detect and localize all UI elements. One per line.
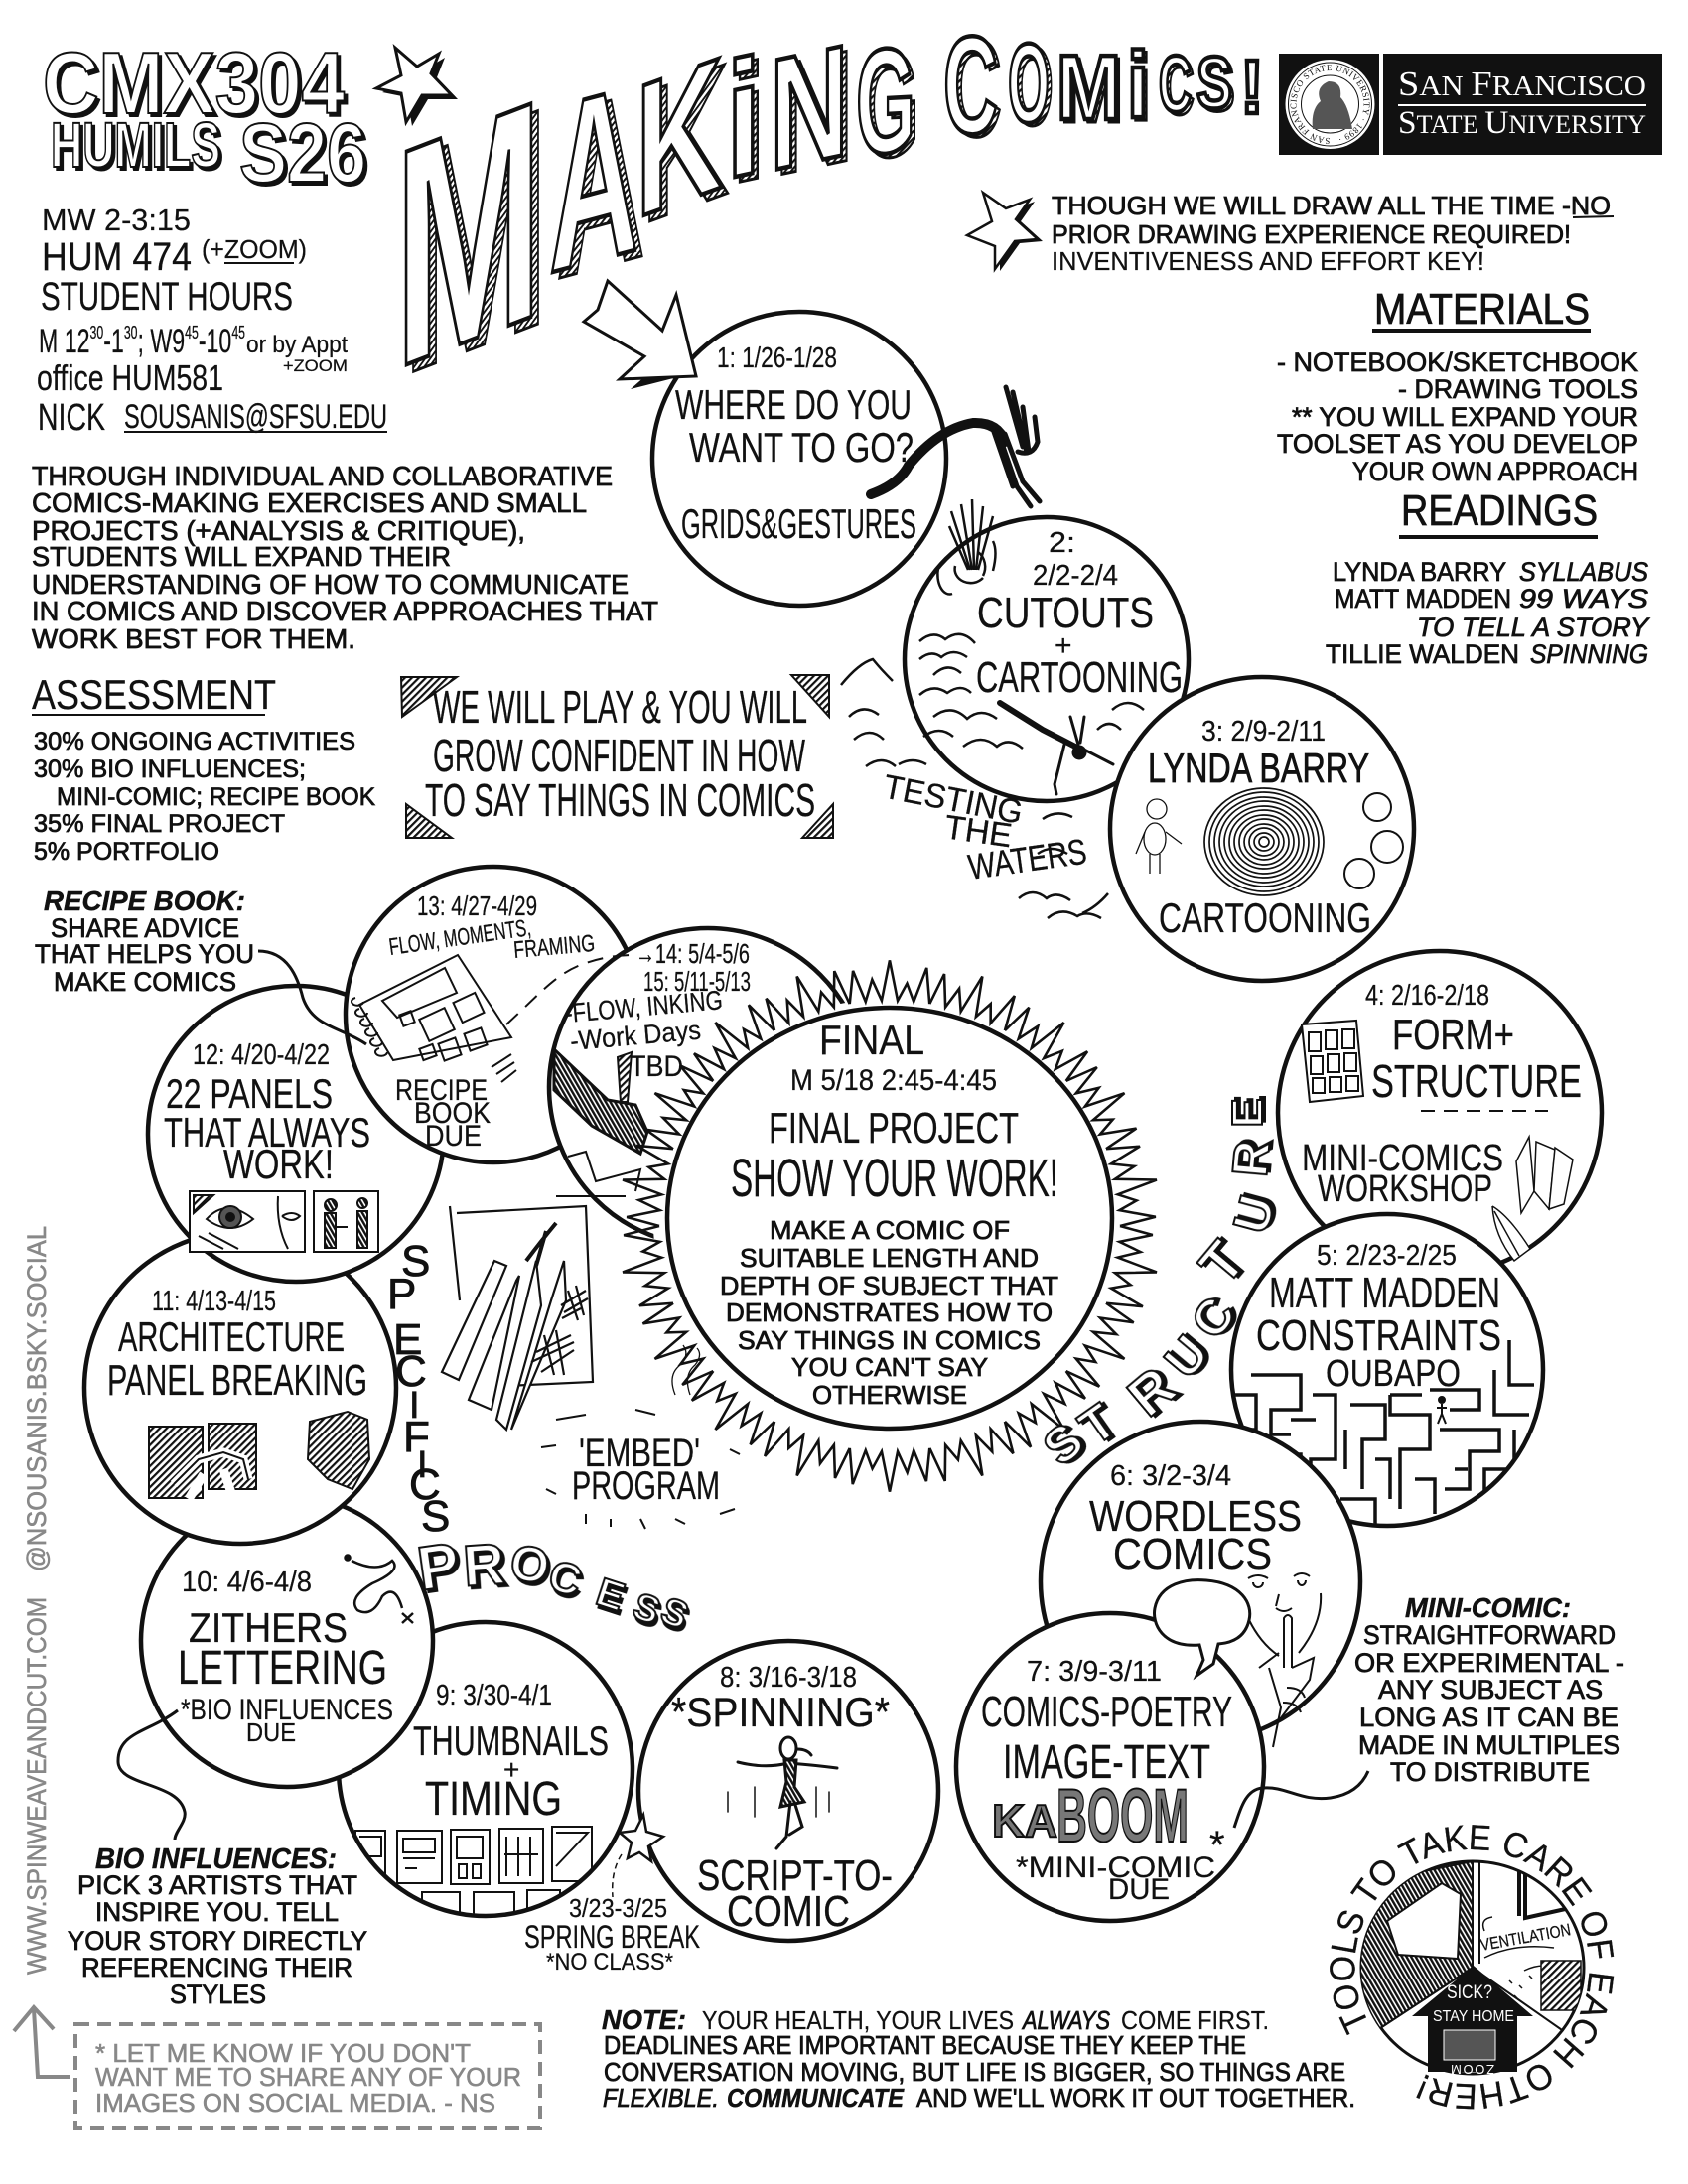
title: Making Comics: A	[549, 34, 638, 324]
panel: week 9 circle: TIMING	[425, 1773, 562, 1826]
mini-comic note: MADE IN MULTIPLES	[1358, 1730, 1620, 1760]
readings section: SPINNING	[1530, 639, 1648, 669]
label: structure curved lettering: R	[1116, 1354, 1187, 1429]
label: process curved lettering: R	[461, 1532, 507, 1599]
panel: week 3 circle: CARTOONING	[1159, 894, 1371, 941]
course description paragraph: STUDENTS WILL EXPAND THEIR	[32, 541, 451, 572]
mini-comic note: LONG AS IT CAN BE	[1359, 1703, 1618, 1732]
dashed social media notice	[75, 2024, 540, 2128]
class logistics text: -10	[199, 323, 231, 360]
icon: tiny figure in maze	[1437, 1397, 1447, 1424]
spring break marker	[524, 1815, 700, 1976]
assessment section: 30% ONGOING ACTIVITIES	[34, 728, 355, 755]
label: specifics vertical lettering: S	[421, 1492, 450, 1541]
panel: week 10 circle: DUE	[246, 1717, 296, 1747]
panel: week 8 circle	[638, 1641, 938, 1941]
title: Making Comics: M	[401, 39, 550, 443]
recipe book note: MAKE COMICS	[54, 967, 236, 997]
icon: page grid	[1302, 1021, 1363, 1102]
panel: week 11 circle: 11: 4/13-4/15	[152, 1286, 276, 1317]
tools to take care of each other emblem: TOOLS TO TAKE CARE OF EACH OTHER!	[1330, 1825, 1615, 2109]
icon: waves outside week 2	[841, 659, 1108, 918]
assessment section: 5% PORTFOLIO	[34, 838, 219, 866]
label: embed program: 'EMBED'	[579, 1432, 700, 1475]
tools to take care of each other emblem: VENTILATION	[1478, 1920, 1572, 1955]
panel: final project sunburst: MAKE A COMIC OF	[770, 1215, 1010, 1245]
readings section: SYLLABUS	[1519, 557, 1648, 587]
bio influences note: PICK 3 ARTISTS THAT	[77, 1870, 357, 1900]
title: Making Comics: N	[774, 17, 854, 210]
bio influences note: STYLES	[170, 1979, 266, 2009]
title: Making Comics: C	[1162, 43, 1195, 132]
kaboom lettering: BOOM	[1056, 1774, 1189, 1858]
class logistics text: +ZOOM	[283, 356, 348, 375]
title: Making Comics: O	[1008, 21, 1050, 146]
framed statement: we will play: GROW CONFIDENT IN HOW	[433, 730, 805, 781]
readings section: 99 WAYS	[1519, 584, 1648, 614]
star note: no drawing experience: INVENTIVENESS AND EFFORT KEY!	[1052, 246, 1484, 276]
class logistics text: -1	[103, 323, 124, 360]
panel: week 9 circle: THUMBNAILS	[413, 1717, 609, 1764]
panel: weeks 14 and 15 circle: -Work Days	[569, 1016, 702, 1056]
label: testing the waters: THE	[942, 808, 1015, 855]
panel: weeks 14 and 15 circle: →14: 5/4-5/6	[635, 938, 750, 969]
panel: final project sunburst: YOU CAN'T SAY	[791, 1352, 988, 1382]
panel: week 12 circle: 12: 4/20-4/22	[193, 1039, 330, 1071]
panel: weeks 14 and 15 circle: -FLOW, INKING	[564, 985, 724, 1028]
kaboom lettering: KA	[992, 1795, 1057, 1846]
panel: week 2 circle: CARTOONING	[976, 653, 1183, 702]
class logistics text: MW 2-3:15	[42, 203, 191, 237]
class logistics text: M 12	[39, 323, 114, 360]
vertical website and social credit: WWW.SPINWEAVEANDCUT.COM	[22, 1597, 52, 1975]
panel: final project sunburst: SHOW YOUR WORK!	[731, 1149, 1058, 1208]
recipe book note: THAT HELPS YOU	[35, 939, 254, 969]
panel: week 10 circle: LETTERING	[178, 1642, 387, 1695]
panel: week 5 circle	[1231, 1214, 1543, 1526]
panel: week 3 circle: 3: 2/9-2/11	[1201, 716, 1326, 748]
panel: week 11 circle: PANEL BREAKING	[107, 1356, 367, 1405]
ventilation quadrant	[1483, 1866, 1581, 2010]
framed statement: we will play	[401, 675, 833, 838]
health note: NOTE:	[602, 2004, 686, 2035]
icon: recipe notebook	[352, 955, 516, 1082]
mini-comic note: TO DISTRIBUTE	[1390, 1757, 1590, 1787]
course description paragraph	[32, 461, 658, 654]
materials section: MATERIALS	[1374, 285, 1590, 334]
panel: week 4 circle: 4: 2/16-2/18	[1365, 980, 1489, 1012]
health note: ALWAYS	[1021, 2005, 1111, 2035]
health note: AND WE'LL WORK IT OUT TOGETHER.	[916, 2083, 1355, 2113]
panel: week 10 circle: 10: 4/6-4/8	[182, 1567, 312, 1598]
icon: star beside course code	[376, 48, 458, 126]
panel: week 13 circle: BOOK	[414, 1097, 491, 1130]
label: structure curved lettering: C	[1181, 1288, 1246, 1348]
dashed social media notice: * LET ME KNOW IF YOU DON'T	[95, 2038, 471, 2068]
label: process curved lettering: E	[591, 1570, 630, 1620]
panel: final project sunburst: SUITABLE LENGTH AND	[740, 1243, 1039, 1273]
label: specifics vertical lettering: I	[417, 1444, 428, 1486]
panel: final project sunburst	[611, 954, 1169, 1498]
icon: shushing face	[1248, 1573, 1321, 1747]
panel: week 7 circle: IMAGE-TEXT	[1003, 1736, 1210, 1789]
dashed social media notice: IMAGES ON SOCIAL MEDIA. - NS	[95, 2088, 495, 2117]
panel: week 4 circle	[1278, 951, 1602, 1275]
university logo: STATE UNIVERSITY	[1398, 105, 1646, 141]
panel: week 12 circle: 22 PANELS	[166, 1070, 333, 1117]
health note: DEADLINES ARE IMPORTANT BECAUSE THEY KEEP THE	[604, 2030, 1246, 2060]
icon: cartoon man	[1136, 799, 1182, 874]
mini-comic note: ANY SUBJECT AS	[1378, 1675, 1603, 1705]
stay home arrow house	[1412, 1966, 1533, 2077]
panel: week 8 circle: SCRIPT-TO-	[697, 1851, 893, 1900]
icon: thumbnail pages	[355, 1827, 592, 1916]
panel: week 7 circle: COMICS-POETRY	[981, 1688, 1232, 1736]
title: Making Comics: O	[1012, 24, 1054, 149]
course description paragraph: WORK BEST FOR THEM.	[32, 623, 355, 654]
university logo	[1279, 54, 1662, 155]
label: structure curved lettering: U	[1154, 1325, 1219, 1388]
panel: final project sunburst: M 5/18 2:45-4:45	[790, 1064, 997, 1097]
kaboom lettering	[992, 1774, 1189, 1858]
icon: arrow pointing into week 1	[584, 281, 696, 389]
icon: inking hand	[554, 1049, 647, 1196]
icon: art tools drawing	[442, 1206, 593, 1430]
bio influences note	[68, 1843, 367, 2009]
course description paragraph: IN COMICS AND DISCOVER APPROACHES THAT	[32, 596, 658, 626]
panel: week 13 circle	[346, 867, 641, 1162]
panel: week 5 circle: MATT MADDEN	[1269, 1269, 1500, 1317]
panel: week 1 circle: WANT TO GO?	[689, 424, 914, 471]
course code heading: CMX304	[43, 34, 345, 132]
star note: no drawing experience: THOUGH WE WILL DRAW ALL THE TIME -NO	[1052, 191, 1611, 220]
mini-comic note	[1354, 1592, 1624, 1787]
label: process curved lettering: P	[413, 1531, 464, 1604]
class logistics text: (+ZOOM)	[202, 234, 307, 264]
bio influences note: YOUR STORY DIRECTLY	[68, 1926, 367, 1956]
title: Making Comics: i	[1127, 33, 1149, 138]
icon: round faces	[1344, 793, 1403, 888]
mini-comic note: STRAIGHTFORWARD	[1363, 1620, 1616, 1650]
course code heading: S26	[239, 106, 366, 200]
framed statement: we will play: WE WILL PLAY & YOU WILL	[433, 681, 807, 733]
panel: week 10 circle: *BIO INFLUENCES	[181, 1694, 393, 1726]
panel: final project sunburst: DEPTH OF SUBJECT THAT	[720, 1271, 1058, 1300]
label: embed program	[541, 1345, 740, 1529]
label: specifics vertical lettering: S	[401, 1237, 430, 1286]
label: specifics vertical lettering	[387, 1237, 450, 1541]
dashed social media notice: WANT ME TO SHARE ANY OF YOUR	[95, 2062, 521, 2092]
assessment section: 35% FINAL PROJECT	[34, 810, 285, 838]
panel: week 9 circle: +	[503, 1754, 519, 1785]
panel: week 3 circle	[1110, 677, 1414, 981]
label: specifics vertical lettering: I	[409, 1385, 420, 1427]
icon: speech bubble	[1155, 1580, 1250, 1676]
panel: week 7 circle: *	[1209, 1824, 1225, 1867]
panel: week 12 circle: THAT ALWAYS	[164, 1109, 370, 1156]
label: specifics vertical lettering: F	[403, 1413, 430, 1461]
callout line: recipe book	[258, 951, 366, 1044]
panel: week 6 circle: COMICS	[1113, 1530, 1272, 1578]
materials section: ** YOU WILL EXPAND YOUR	[1292, 402, 1638, 432]
panel: final project sunburst: FINAL PROJECT	[769, 1104, 1019, 1153]
class logistics text	[37, 203, 387, 439]
spring break marker: SPRING BREAK	[524, 1919, 700, 1955]
panel: week 9 circle	[339, 1622, 633, 1916]
label: process curved lettering: S	[655, 1589, 694, 1638]
panel: week 2 circle	[905, 499, 1189, 801]
title: Making Comics	[394, 7, 1264, 443]
class logistics text: ; W9	[137, 323, 185, 360]
panel: week 1 circle: WHERE DO YOU	[675, 381, 912, 428]
icon: reaching hand	[308, 1412, 369, 1489]
title: Making Comics: C	[947, 10, 1002, 166]
panel: final project sunburst: OTHERWISE	[812, 1380, 967, 1410]
stay home arrow house: STAY HOME	[1433, 2008, 1514, 2025]
university logo: SAN FRANCISCO	[1398, 65, 1646, 103]
callout line: mini-comic	[1234, 1771, 1368, 1828]
recipe book note: RECIPE BOOK:	[44, 886, 245, 916]
label: specifics vertical lettering: E	[393, 1315, 422, 1364]
health note: YOUR HEALTH, YOUR LIVES	[702, 2005, 1014, 2035]
title: Making Comics: S	[1196, 42, 1232, 124]
panel: weeks 14 and 15 circle	[549, 928, 867, 1246]
panel: week 5 circle: CONSTRAINTS	[1256, 1311, 1501, 1360]
mini-comic note: OR EXPERIMENTAL -	[1354, 1648, 1624, 1678]
recipe book note	[35, 886, 254, 997]
class logistics text: 30	[90, 323, 103, 342]
panel: week 1 circle: GRIDS&GESTURES	[681, 500, 916, 547]
panel: final project sunburst: DEMONSTRATES HOW TO	[726, 1297, 1053, 1327]
title: Making Comics: C	[1159, 40, 1192, 129]
materials section	[1277, 285, 1638, 486]
panel: week 4 circle: STRUCTURE	[1371, 1055, 1582, 1107]
panel: week 8 circle: *SPINNING*	[671, 1689, 890, 1735]
panel: final project sunburst: SAY THINGS IN COMICS	[738, 1325, 1041, 1355]
panel: week 6 circle	[1041, 1422, 1360, 1747]
materials section: - NOTEBOOK/SKETCHBOOK	[1277, 347, 1638, 377]
health note: COMMUNICATE	[727, 2083, 905, 2113]
panel: week 7 circle	[956, 1613, 1264, 1921]
icon: splash and ripples	[937, 499, 995, 594]
title: Making Comics: M	[1056, 36, 1121, 139]
materials section: TOOLSET AS YOU DEVELOP	[1277, 429, 1638, 459]
icon: maze	[1231, 1340, 1534, 1525]
class logistics text: SOUSANIS@SFSU.EDU	[124, 398, 387, 436]
panel: week 5 circle: OUBAPO	[1326, 1353, 1461, 1395]
panel: week 4 circle: WORKSHOP	[1318, 1168, 1492, 1210]
panel: week 7 circle: *MINI-COMIC	[1016, 1851, 1215, 1884]
title: Making Comics: M	[1059, 39, 1124, 142]
class logistics text: 30	[124, 323, 137, 342]
label: process curved lettering: S	[628, 1585, 665, 1633]
panel: week 13 circle: RECIPE	[395, 1074, 488, 1107]
health note: CONVERSATION MOVING, BUT LIFE IS BIGGER, SO THINGS ARE	[604, 2057, 1345, 2087]
panel: week 12 circle	[148, 986, 444, 1282]
label: structure curved lettering: S	[1033, 1413, 1093, 1476]
title: Making Comics: N	[770, 12, 849, 205]
icon: spiral	[1204, 788, 1324, 895]
panel: week 7 circle: 7: 3/9-3/11	[1027, 1656, 1162, 1688]
title: Making Comics: A	[556, 40, 645, 330]
bio influences note: BIO INFLUENCES:	[95, 1843, 337, 1875]
label: process curved lettering: C	[543, 1551, 587, 1606]
panel: week 1 circle: 1: 1/26-1/28	[717, 342, 837, 374]
label: testing the waters: TESTING	[880, 768, 1026, 832]
panel: week 10 circle: ZITHERS	[189, 1604, 348, 1651]
panel: week 13 circle: FLOW, MOMENTS,	[387, 914, 532, 961]
assessment section: MINI-COMIC; RECIPE BOOK	[57, 783, 375, 811]
course code heading	[43, 34, 366, 200]
framed statement: we will play: TO SAY THINGS IN COMICS	[425, 774, 815, 826]
mini-comic note: MINI-COMIC:	[1405, 1592, 1571, 1623]
readings section: TO TELL A STORY	[1417, 613, 1650, 642]
label: specifics vertical lettering: C	[409, 1460, 441, 1509]
title: Making Comics: i	[731, 29, 767, 219]
vertical website and social credit: @NSOUSANIS.BSKY.SOCIAL	[22, 1226, 52, 1571]
dashed arrow to week 14	[506, 955, 635, 1024]
icon: diving figure	[1000, 703, 1113, 794]
label: structure curved lettering: T	[1187, 1229, 1257, 1296]
zigzag burst	[611, 954, 1169, 1498]
readings section	[1326, 486, 1650, 669]
label: structure curved lettering: R	[1222, 1139, 1280, 1179]
panel: weeks 14 and 15 circle: 15: 5/11-5/13	[643, 966, 751, 997]
mask quadrant	[1361, 1862, 1562, 2031]
class logistics text: NICK	[38, 397, 105, 439]
recipe book note: SHARE ADVICE	[51, 913, 239, 943]
assessment section: 30% BIO INFLUENCES;	[34, 755, 306, 783]
panel: week 6 circle: WORDLESS	[1089, 1492, 1302, 1541]
panel: week 13 circle: DUE	[425, 1120, 482, 1153]
panel: week 2 circle: +	[1055, 629, 1072, 662]
panel: week 4 circle: FORM+	[1392, 1011, 1514, 1059]
panel: week 13 circle: FRAMING	[512, 930, 596, 964]
icon: spinning figure	[728, 1737, 837, 1848]
title: Making Comics: C	[943, 7, 998, 163]
stay home arrow house: SICK?	[1447, 1982, 1492, 2003]
assessment section: ASSESSMENT	[32, 671, 276, 718]
title: Making Comics: K	[641, 22, 729, 265]
panel: week 2 circle: 2/2-2/4	[1033, 560, 1118, 592]
stay home arrow house: ZOOM	[1451, 2062, 1494, 2077]
star note: no drawing experience: PRIOR DRAWING EXPERIENCE REQUIRED!	[1052, 219, 1571, 249]
star note: no drawing experience	[967, 191, 1614, 276]
title: Making Comics: i	[1130, 36, 1152, 141]
icon: mini-comic booklets	[1492, 1137, 1573, 1261]
class logistics text: STUDENT HOURS	[41, 275, 293, 319]
label: process curved lettering: O	[506, 1534, 553, 1594]
readings section: TILLIE WALDEN	[1326, 639, 1519, 669]
label: embed program: PROGRAM	[572, 1464, 720, 1508]
panel: week 11 circle: ARCHITECTURE	[118, 1313, 345, 1360]
label: structure curved lettering: U	[1222, 1190, 1286, 1239]
readings section: MATT MADDEN	[1335, 584, 1511, 614]
panel: week 6 circle: 6: 3/2-3/4	[1110, 1460, 1231, 1492]
course description paragraph: PROJECTS (+ANALYSIS & CRITIQUE),	[32, 515, 525, 546]
panel: week 11 circle	[84, 1232, 396, 1544]
title: Making Comics: G	[860, 20, 919, 190]
panel: week 7 circle: DUE	[1108, 1873, 1170, 1906]
course description paragraph: UNDERSTANDING OF HOW TO COMMUNICATE	[32, 569, 629, 600]
title: Making Comics: M	[394, 32, 543, 436]
class logistics text: 45	[231, 323, 245, 342]
panel: week 2 circle: CUTOUTS	[977, 589, 1154, 637]
label: structure curved lettering: E	[1223, 1098, 1272, 1128]
university logo: SAN FRANCISCO STATE UNIVERSITY · 1899 ·	[1291, 65, 1370, 144]
course description paragraph: COMICS-MAKING EXERCISES AND SMALL	[32, 487, 587, 518]
readings section: READINGS	[1401, 486, 1598, 535]
class logistics text: HUM 474	[42, 235, 192, 279]
panel: week 10 circle	[141, 1495, 433, 1787]
icon: broken panel with falling figure	[149, 1424, 256, 1499]
readings section: LYNDA BARRY	[1333, 557, 1506, 587]
label: testing the waters	[880, 768, 1089, 887]
panel: week 3 circle: LYNDA BARRY	[1148, 745, 1369, 791]
icon: water waves	[919, 634, 1156, 754]
panel: week 2 circle: 2:	[1049, 527, 1075, 559]
label: testing the waters: WATERS	[965, 831, 1089, 887]
bio influences note: REFERENCING THEIR	[81, 1953, 352, 1982]
callout line: bio influences	[118, 1710, 185, 1840]
materials section: - DRAWING TOOLS	[1398, 374, 1638, 404]
class logistics text: or by Appt	[246, 332, 348, 358]
panel: week 4 circle: MINI-COMICS	[1302, 1138, 1503, 1179]
title: Making Comics: i	[726, 24, 762, 214]
spring break marker: *NO CLASS*	[546, 1949, 673, 1976]
title: Making Comics: !	[1240, 45, 1264, 130]
panel: week 8 circle: COMIC	[727, 1887, 850, 1936]
assessment section	[32, 671, 375, 866]
label: specifics vertical lettering: P	[387, 1270, 416, 1318]
class logistics text: office HUM581	[37, 357, 223, 398]
health note	[602, 2004, 1355, 2113]
panel: weeks 14 and 15 circle: TBD	[630, 1050, 683, 1083]
label: process curved lettering	[413, 1531, 694, 1638]
panel: week 1 circle	[652, 312, 946, 606]
title: Making Comics: S	[1199, 45, 1235, 127]
panel: week 8 circle: 8: 3/16-3/18	[720, 1662, 857, 1694]
grey arrow	[14, 2007, 70, 2077]
bio influences note: INSPIRE YOU. TELL	[95, 1897, 339, 1927]
course description paragraph: THROUGH INDIVIDUAL AND COLLABORATIVE	[32, 461, 613, 491]
vertical website and social credit	[22, 1226, 52, 1975]
materials section: YOUR OWN APPROACH	[1352, 457, 1638, 486]
spring break marker: 3/23-3/25	[569, 1893, 667, 1923]
icon: squiggle	[346, 1555, 413, 1623]
panel: week 12 circle: WORK!	[223, 1141, 334, 1187]
icon: two figures comic panel	[314, 1191, 378, 1252]
health note: FLEXIBLE.	[603, 2083, 719, 2113]
icon: eye comic panel	[190, 1191, 305, 1252]
course code heading: HUMILS	[51, 109, 220, 181]
class logistics text: 45	[185, 323, 199, 342]
title: Making Comics: K	[635, 16, 723, 259]
panel: week 5 circle: 5: 2/23-2/25	[1317, 1240, 1457, 1272]
panel: week 13 circle: 13: 4/27-4/29	[417, 890, 537, 921]
title: Making Comics: G	[856, 16, 915, 186]
label: structure curved lettering	[1033, 1098, 1286, 1476]
panel: final project sunburst: FINAL	[819, 1017, 924, 1063]
panel: week 9 circle: 9: 3/30-4/1	[436, 1680, 552, 1711]
health note: COME FIRST.	[1121, 2005, 1269, 2035]
label: structure curved lettering: T	[1069, 1393, 1126, 1456]
icon: jumping figure on week 1 circle	[871, 387, 1040, 506]
label: specifics vertical lettering: C	[395, 1347, 427, 1396]
